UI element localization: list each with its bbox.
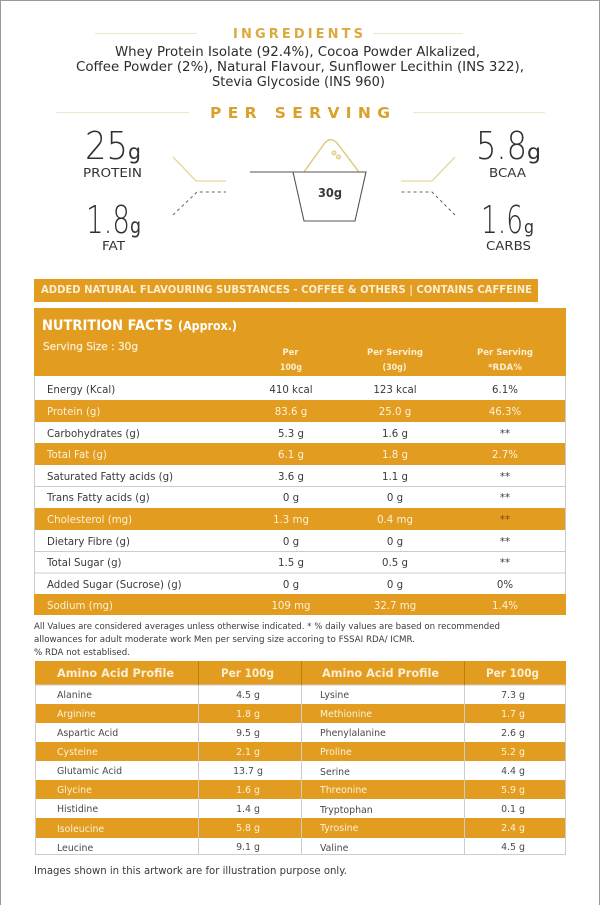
row: carbohydrates: 5.3 g <box>278 429 304 440</box>
row: fibre: 0 g <box>283 537 299 548</box>
amino rows: Glycine <box>57 785 92 796</box>
row: energy: 123 kcal <box>373 385 417 396</box>
row: sodium: 32.7 mg <box>374 601 416 612</box>
ingredients text: Coffee Powder (2%), Natural Flavour, Sunflower Lecithin (INS 322), <box>76 59 524 75</box>
row: added sugar: 0% <box>497 580 513 591</box>
stat: carbs: CARBS <box>486 238 531 253</box>
amino rows <box>57 690 525 854</box>
amino header <box>57 666 539 680</box>
row: sugar: Total Sugar (g) <box>46 558 122 569</box>
stat: bcaa: BCAA <box>489 165 526 180</box>
amino rows: Alanine <box>57 690 92 701</box>
table frame and stripes <box>34 400 566 615</box>
row: saturated: 1.1 g <box>382 472 408 483</box>
row: added sugar <box>47 580 513 591</box>
ingredients text: Stevia Glycoside (INS 960) <box>212 74 385 90</box>
row: energy <box>47 385 518 396</box>
amino rows: 2.1 g <box>236 747 260 758</box>
banner: flavouring notice: ADDED NATURAL FLAVOURING SUBSTANCES - COFFEE & OTHERS | CONTAINS CAFFEINE <box>41 284 532 296</box>
amino rows: Tryptophan <box>319 805 373 816</box>
amino header: Per 100g <box>221 666 274 680</box>
row: sodium <box>47 601 518 612</box>
row: saturated: ** <box>500 472 510 483</box>
icon: scoop with powder: 30g <box>318 185 342 200</box>
nutrition title: (Approx.) <box>178 319 237 333</box>
row: fibre: ** <box>500 537 510 548</box>
column headers: *RDA% <box>488 363 522 373</box>
ingredients text <box>76 44 524 90</box>
amino rows: 7.3 g <box>501 690 525 701</box>
ingredients text: Whey Protein Isolate (92.4%), Cocoa Powder Alkalized, <box>115 44 480 60</box>
row: carbohydrates: 1.6 g <box>382 429 408 440</box>
row: sugar <box>46 558 510 569</box>
row: total fat: 2.7% <box>492 450 518 461</box>
column headers: Per Serving <box>367 348 423 358</box>
row: carbohydrates: ** <box>500 429 510 440</box>
column headers: Per Serving <box>477 348 533 358</box>
row: added sugar: Added Sugar (Sucrose) (g) <box>47 580 182 591</box>
row: sugar: 1.5 g <box>278 558 304 569</box>
amino rows: 4.5 g <box>236 690 260 701</box>
row: protein <box>47 407 521 418</box>
disclaimer: Images shown in this artwork are for illustration purpose only. <box>34 865 347 877</box>
amino rows: 2.6 g <box>501 728 525 739</box>
heading: ingredients: INGREDIENTS <box>233 27 363 42</box>
amino rows: Threonine <box>319 785 367 796</box>
row: trans <box>46 493 510 504</box>
amino rows: Glutamic Acid <box>57 766 122 777</box>
row: sodium: 109 mg <box>271 601 311 612</box>
row: total fat: 6.1 g <box>278 450 304 461</box>
amino rows: 1.8 g <box>236 709 260 720</box>
nutrition title: NUTRITION FACTS <box>42 318 173 334</box>
row: fibre <box>47 537 510 548</box>
row: cholesterol <box>47 515 510 526</box>
amino rows: 9.5 g <box>236 728 260 739</box>
row: sodium: 1.4% <box>492 601 518 612</box>
amino rows: 5.2 g <box>501 747 525 758</box>
row: energy: 6.1% <box>492 385 518 396</box>
footnote: All Values are considered averages unless otherwise indicated. * % daily values are based on recommended <box>34 621 500 632</box>
column headers <box>280 348 533 373</box>
amino rows: Cysteine <box>57 747 98 758</box>
row: energy: 410 kcal <box>269 385 313 396</box>
amino rows: Isoleucine <box>57 824 104 835</box>
amino rows: 0.1 g <box>501 804 525 815</box>
stat: protein: 25 <box>85 124 128 168</box>
amino header: Amino Acid Profile <box>57 666 174 680</box>
stat: fat: FAT <box>102 238 125 253</box>
stat: protein: g <box>128 140 141 164</box>
nutrition facts table <box>34 308 566 615</box>
row: added sugar: 0 g <box>387 580 403 591</box>
amino rows: 9.1 g <box>236 842 260 853</box>
row: carbohydrates: Carbohydrates (g) <box>47 429 140 440</box>
row: sodium: Sodium (mg) <box>47 601 113 612</box>
row: cholesterol: ** <box>500 515 510 526</box>
icon: scoop with powder <box>250 140 366 221</box>
amino rows: Leucine <box>57 843 93 854</box>
row: trans: Trans Fatty acids (g) <box>46 493 150 504</box>
column headers: (30g) <box>382 363 406 373</box>
footnote: allowances for adult moderate work Men per serving size accoring to FSSAI RDA/ ICMR. <box>34 634 415 645</box>
row: added sugar: 0 g <box>283 580 299 591</box>
amino rows: 4.4 g <box>501 766 525 777</box>
amino rows: 5.8 g <box>236 823 260 834</box>
row: cholesterol: 1.3 mg <box>273 515 309 526</box>
row: protein: 83.6 g <box>275 407 307 418</box>
amino rows: Valine <box>320 843 349 854</box>
row: cholesterol: 0.4 mg <box>377 515 413 526</box>
row: total fat <box>46 450 518 461</box>
row: total fat: 1.8 g <box>382 450 408 461</box>
row: trans: 0 g <box>387 493 403 504</box>
stat: protein: PROTEIN <box>83 165 142 180</box>
stat: bcaa: 5.8 <box>476 124 527 168</box>
connector lines: gold <box>173 157 455 181</box>
amino rows: 13.7 g <box>233 766 263 777</box>
heading: per serving: PER SERVING <box>210 104 390 122</box>
amino header: Amino Acid Profile <box>322 666 439 680</box>
row: fibre: Dietary Fibre (g) <box>47 537 130 548</box>
stat: fat: 1.8 <box>86 198 130 242</box>
amino rows: 1.6 g <box>236 785 260 796</box>
amino rows: Arginine <box>57 709 96 720</box>
row: protein: 25.0 g <box>379 407 411 418</box>
amino header: Per 100g <box>486 666 539 680</box>
column headers: 100g <box>280 363 302 373</box>
row: saturated: Saturated Fatty acids (g) <box>47 472 173 483</box>
amino rows: Phenylalanine <box>320 728 386 739</box>
row: protein: 46.3% <box>489 407 521 418</box>
banner: flavouring notice <box>34 279 538 302</box>
amino rows: Proline <box>320 747 352 758</box>
stat: carbs: g <box>524 217 534 238</box>
connector lines: dashed <box>173 192 455 215</box>
stat: fat: g <box>130 214 141 238</box>
column headers: Per <box>282 348 299 358</box>
stat: protein <box>83 124 142 180</box>
row: saturated <box>47 472 510 483</box>
footnote: % RDA not establised. <box>34 647 130 658</box>
row: sugar: 0.5 g <box>382 558 408 569</box>
row: cholesterol: Cholesterol (mg) <box>47 515 132 526</box>
stat: bcaa: g <box>527 140 541 164</box>
amino rows: Aspartic Acid <box>57 728 118 739</box>
amino rows: 5.9 g <box>501 785 525 796</box>
stat: carbs: 1.6 <box>481 198 523 242</box>
amino rows: 1.7 g <box>501 709 525 720</box>
row: total fat: Total Fat (g) <box>46 450 107 461</box>
serving size: Serving Size : 30g <box>43 341 138 353</box>
row: energy: Energy (Kcal) <box>47 385 115 396</box>
amino rows: Serine <box>320 767 350 778</box>
row: fibre: 0 g <box>387 537 403 548</box>
row: protein: Protein (g) <box>47 407 100 418</box>
amino rows: Tyrosine <box>319 823 359 834</box>
amino rows: 2.4 g <box>501 823 525 834</box>
row: sugar: ** <box>500 558 510 569</box>
amino rows: 4.5 g <box>501 842 525 853</box>
footnote <box>34 621 500 658</box>
row: carbohydrates <box>47 429 510 440</box>
amino rows: Histidine <box>57 804 98 815</box>
row: trans: 0 g <box>283 493 299 504</box>
amino acid table <box>35 661 566 855</box>
row: saturated: 3.6 g <box>278 472 304 483</box>
amino rows: 1.4 g <box>236 804 260 815</box>
amino rows: Methionine <box>320 709 372 720</box>
row: trans: ** <box>500 493 510 504</box>
amino rows: Lysine <box>320 690 349 701</box>
